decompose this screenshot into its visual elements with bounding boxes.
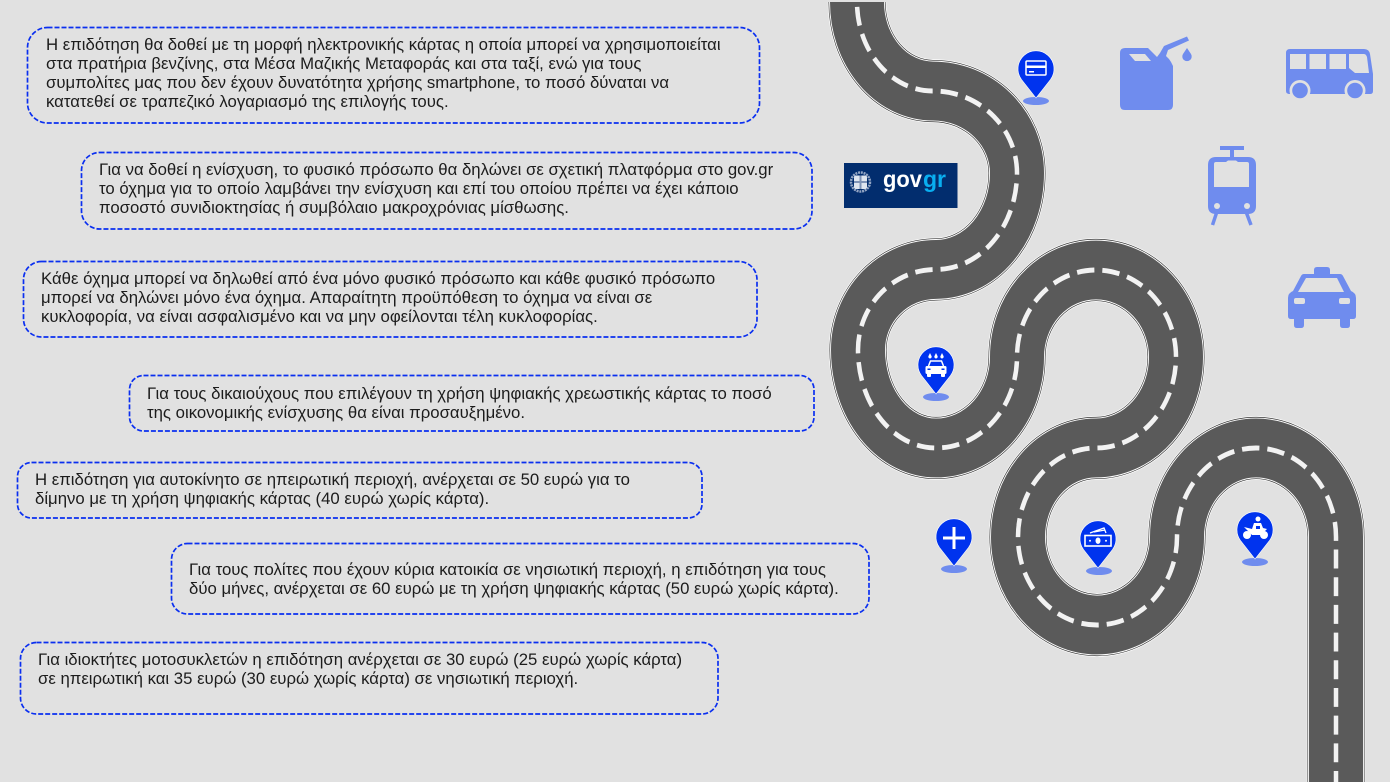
text: vehicle conditions: Κάθε όχημα μπορεί να δηλωθεί από ένα μόνο φυσικό πρόσωπο και κάθε φυσικό πρόσωπο <box>41 269 715 288</box>
icon: money pin <box>1080 521 1116 575</box>
panel: gov.gr declaration <box>82 152 812 229</box>
logo: gov.gr: gr <box>923 166 946 192</box>
text: mainland car subsidy: Η επιδότηση για αυτοκίνητο σε ηπειρωτική περιοχή, ανέρχεται σε 50 ευρώ για το <box>35 470 630 489</box>
text: debit card bonus <box>147 384 772 422</box>
icon: fuel can <box>1120 36 1192 110</box>
text: gov.gr declaration: Για να δοθεί η ενίσχυση, το φυσικό πρόσωπο θα δηλώνει σε σχετική πλατφόρμα στο gov.gr <box>99 160 773 179</box>
icon: car wash pin <box>918 347 954 401</box>
text: debit card bonus: Για τους δικαιούχους που επιλέγουν τη χρήση ψηφιακής χρεωστικής κάρτας το ποσό <box>147 384 772 403</box>
text: vehicle conditions <box>41 269 715 326</box>
text: island subsidy: δύο μήνες, ανέρχεται σε 60 ευρώ με τη χρήση ψηφιακής κάρτας (50 ευρώ χωρίς κάρτα). <box>189 579 839 598</box>
panel: vehicle conditions <box>24 262 757 337</box>
text: electronic card info: στα πρατήρια βενζίνης, στα Μέσα Μαζικής Μεταφοράς και στα ταξί, ενώ για τους <box>46 54 641 73</box>
text: mainland car subsidy <box>35 470 630 508</box>
text: motorcycle subsidy: Για ιδιοκτήτες μοτοσυκλετών η επιδότηση ανέρχεται σε 30 ευρώ (25 ευρώ χωρίς κάρτα) <box>38 650 682 669</box>
panel: mainland car subsidy <box>18 462 702 518</box>
text: island subsidy <box>189 560 839 598</box>
icon: taxi <box>1288 267 1356 328</box>
road <box>857 2 1336 782</box>
text: vehicle conditions: μπορεί να δηλώνει μόνο ένα όχημα. Απαραίτητη προϋπόθεση το όχημα να είναι σε <box>41 288 652 307</box>
icon: card pin <box>1018 51 1054 105</box>
logo: gov.gr <box>844 163 958 208</box>
text: debit card bonus: της οικονομικής ενίσχυσης θα είναι προσαυξημένο. <box>147 403 525 422</box>
panel: debit card bonus <box>130 376 814 431</box>
icon: motorcycle pin <box>1237 512 1273 566</box>
panel: island subsidy <box>172 544 869 614</box>
panel: electronic card info <box>28 28 760 123</box>
text: motorcycle subsidy <box>38 650 682 688</box>
text: mainland car subsidy: δίμηνο με τη χρήση ψηφιακής κάρτας (40 ευρώ χωρίς κάρτα). <box>35 489 489 508</box>
text: electronic card info <box>46 35 721 111</box>
text: vehicle conditions: κυκλοφορία, να είναι ασφαλισμένο και να μην οφείλονται τέλη κυκλοφορίας. <box>41 307 598 326</box>
text: island subsidy: Για τους πολίτες που έχουν κύρια κατοικία σε νησιωτική περιοχή, η επιδότηση για τους <box>189 560 826 579</box>
icon: tram <box>1208 146 1256 225</box>
text: gov.gr declaration: το όχημα για το οποίο λαμβάνει την ενίσχυση και επί του οποίου πρέπει να έχει κάποιο <box>99 179 739 198</box>
text: gov.gr declaration: ποσοστό συνιδιοκτησίας ή συμβόλαιο μακροχρόνιας μίσθωσης. <box>99 198 569 217</box>
text: motorcycle subsidy: σε ηπειρωτική και 35 ευρώ (30 ευρώ χωρίς κάρτα) σε νησιωτική περιοχή. <box>38 669 578 688</box>
text: electronic card info: Η επιδότηση θα δοθεί με τη μορφή ηλεκτρονικής κάρτας η οποία μπορεί να χρησιμοποιείται <box>46 35 721 54</box>
panel: motorcycle subsidy <box>20 642 718 714</box>
text: gov.gr declaration <box>99 160 773 217</box>
icon: bus <box>1286 49 1373 101</box>
icon: plus pin <box>936 519 972 573</box>
text: electronic card info: κατατεθεί σε τραπεζικό λογαριασμό της επιλογής τους. <box>46 92 449 111</box>
text: electronic card info: συμπολίτες μας που δεν έχουν δυνατότητα χρήσης smartphone, το ποσό δύναται να <box>46 73 669 92</box>
logo: gov.gr: gov <box>883 166 922 192</box>
